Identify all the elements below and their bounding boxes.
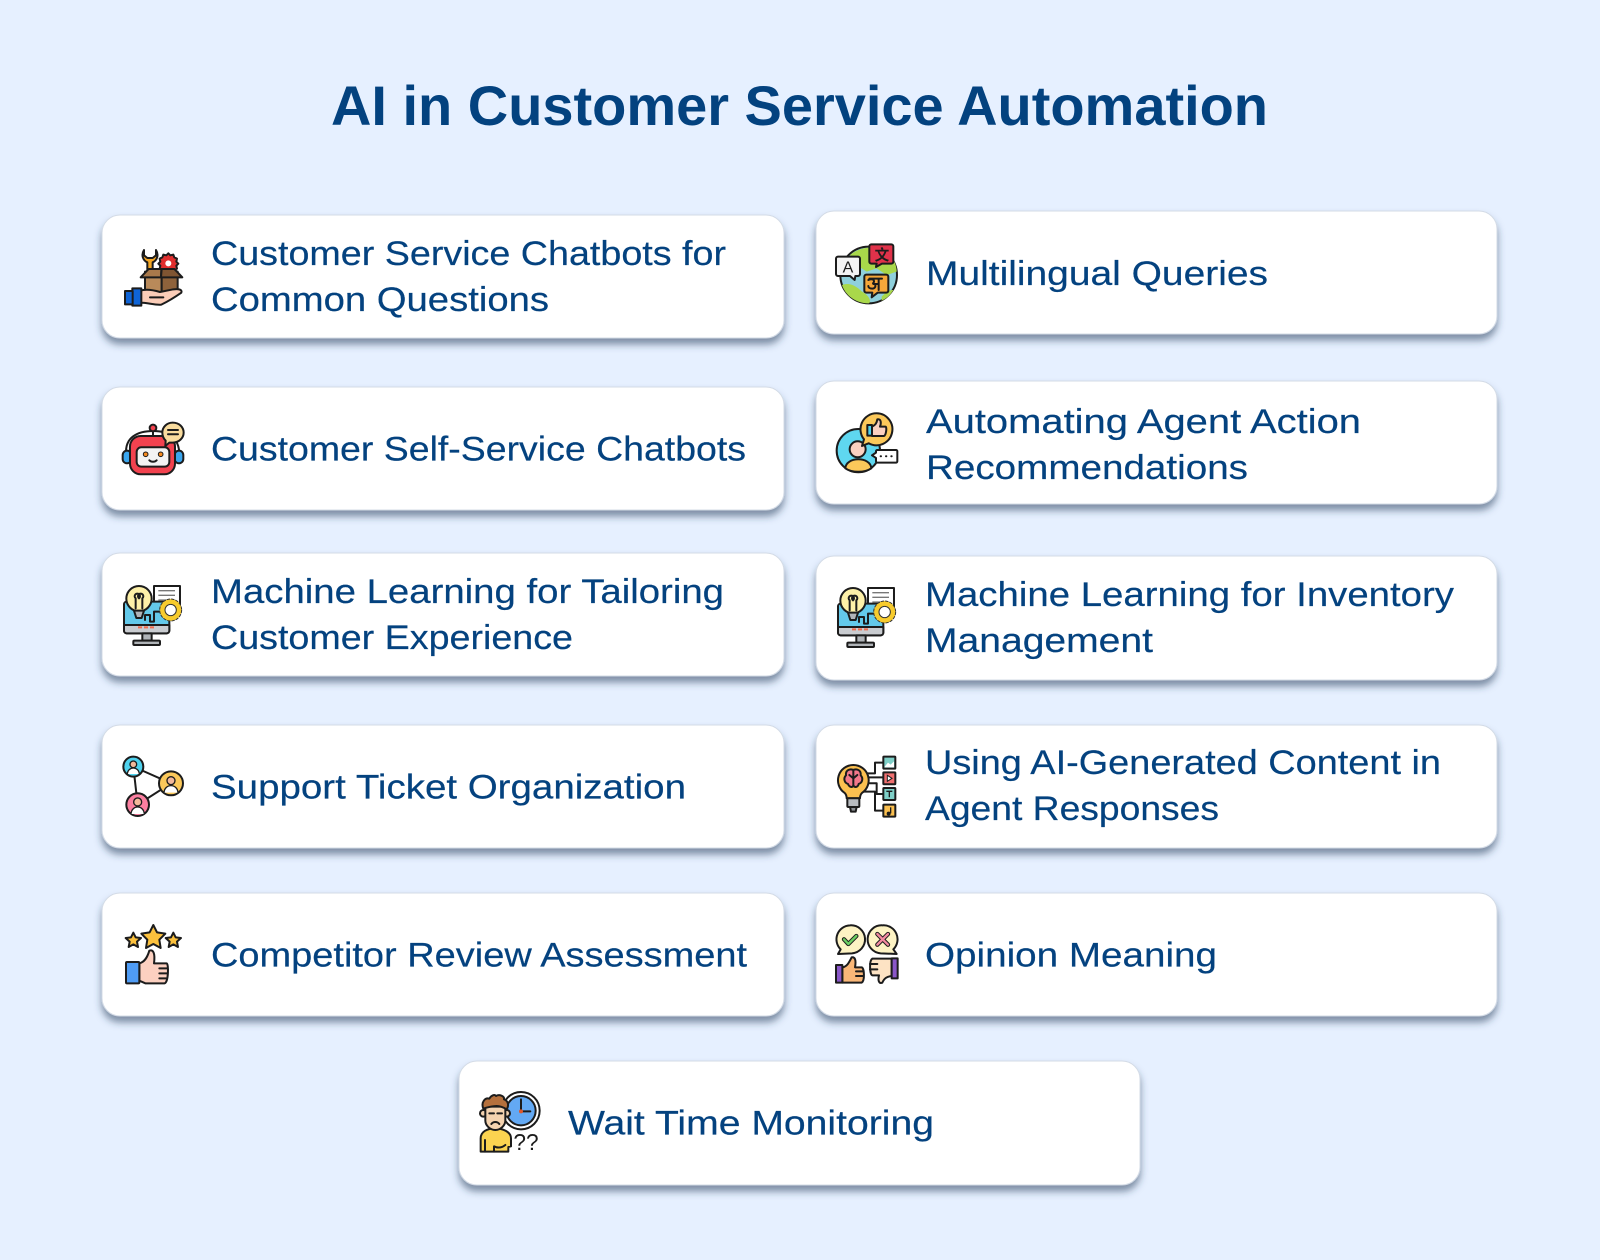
text: card label: Customer Service Chatbots for: [211, 235, 726, 273]
icon: robot with chat bubble: [123, 423, 184, 474]
text: card label: [211, 235, 726, 319]
icon: machine learning monitor: [124, 586, 182, 645]
panel: support ticket organization: [102, 725, 784, 848]
text: card label: Machine Learning for Inventory: [925, 576, 1454, 614]
text: card label: Multilingual Queries: [926, 255, 1268, 293]
panel: wait time monitoring: [459, 1061, 1140, 1185]
text: card label: [925, 576, 1454, 660]
text: card label: Using AI-Generated Content in: [925, 744, 1441, 782]
text: card label: [925, 744, 1441, 828]
text: card label: Recommendations: [926, 449, 1248, 487]
panel: opinion meaning: [816, 893, 1497, 1016]
panel: machine learning customer experience: [102, 553, 784, 676]
icon: waiting customer with clock: [480, 1092, 540, 1155]
icon: globe with language bubbles: 文: [875, 246, 890, 264]
panel: machine learning inventory management: [816, 556, 1497, 680]
icon: agent with thumbs up bubble: [837, 413, 897, 472]
text: card label: Automating Agent Action: [926, 403, 1361, 441]
icon: stars and thumbs up: [126, 925, 181, 983]
title: AI in Customer Service Automation: [331, 74, 1268, 137]
text: card label: Common Questions: [211, 281, 549, 319]
text: card label: Agent Responses: [925, 790, 1219, 828]
text: card label: Wait Time Monitoring: [568, 1104, 934, 1142]
text: card label: [926, 403, 1361, 487]
panel: multilingual queries: [816, 211, 1497, 334]
panel: customer self-service chatbots: [102, 387, 784, 510]
text: card label: Opinion Meaning: [925, 936, 1217, 974]
text: card label: Competitor Review Assessment: [211, 936, 748, 974]
text: card label: Support Ticket Organization: [211, 768, 686, 806]
icon: brain bulb with media: [838, 757, 895, 817]
icon: waiting customer with clock: ??: [513, 1129, 539, 1155]
panel: AI-generated content: [816, 725, 1497, 848]
icon: machine learning monitor: [838, 588, 896, 647]
icon: globe with language bubbles: [836, 244, 897, 303]
text: card label: Customer Self-Service Chatbots: [211, 430, 746, 468]
text: card label: Management: [925, 622, 1154, 660]
text: card label: [211, 573, 724, 657]
icon: hand holding box with tools: [125, 250, 182, 306]
text: card label: Customer Experience: [211, 619, 573, 657]
panel: automating agent action recommendations: [816, 381, 1497, 504]
panel: competitor review assessment: [102, 893, 784, 1016]
icon: globe with language bubbles: A: [843, 260, 854, 277]
text: card label: Machine Learning for Tailoring: [211, 573, 724, 611]
icon: connected people: [123, 757, 183, 816]
icon: opinion bubbles and thumbs: [836, 925, 898, 983]
panel: customer service chatbots: [102, 215, 784, 338]
